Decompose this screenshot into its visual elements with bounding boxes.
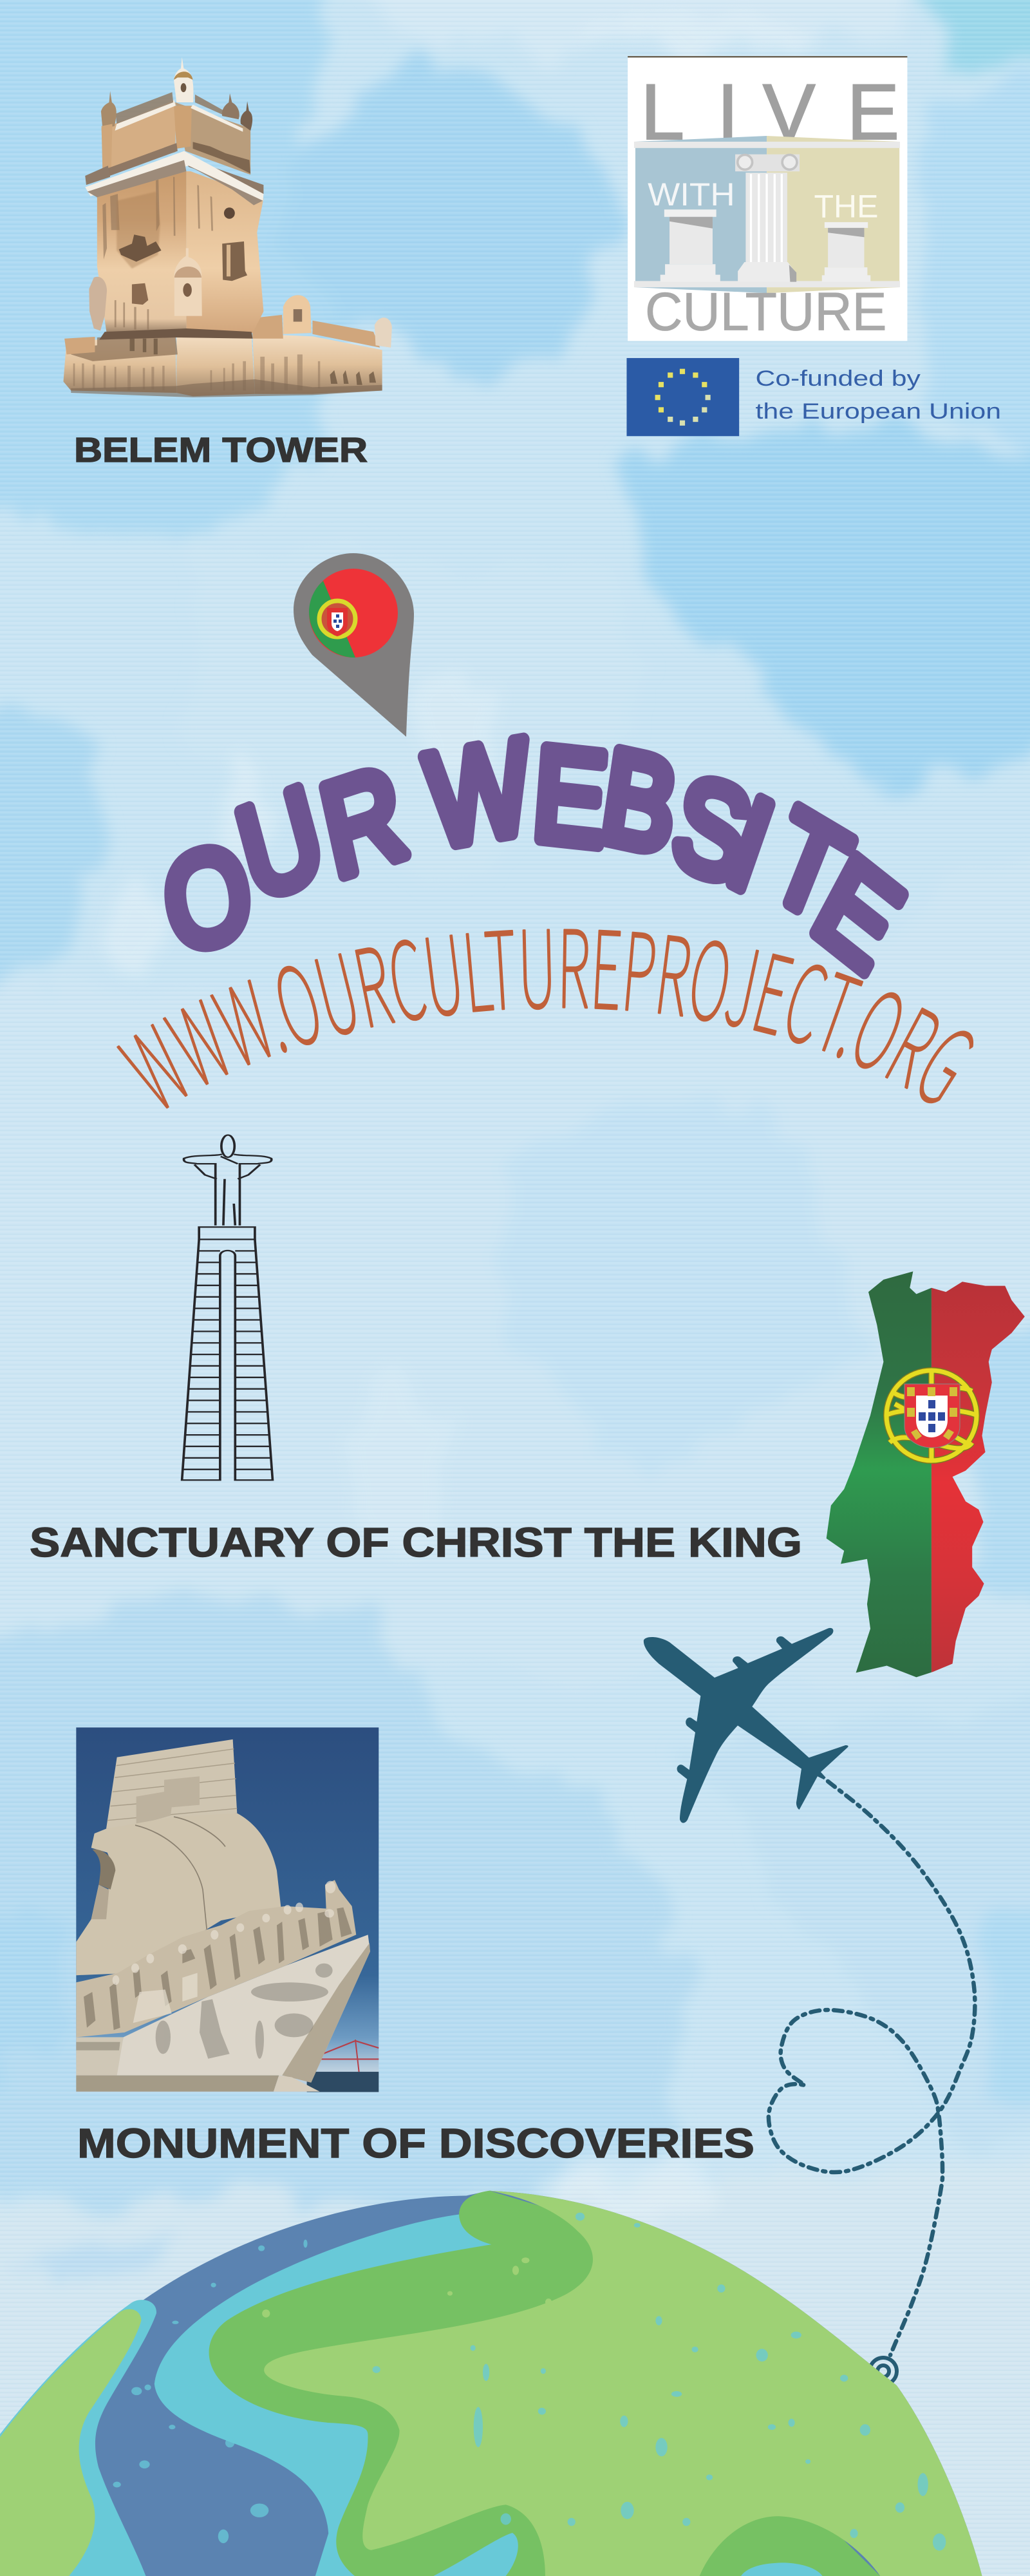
photo: Monument of Discoveries: [76, 1727, 379, 2092]
globe: coastal shelf: [209, 2191, 880, 2576]
globe: ocean: [0, 2191, 982, 2576]
tower: bastion top shadow: [71, 334, 178, 361]
EU stars: [655, 369, 711, 426]
tower: upper storey right: [176, 102, 250, 175]
tower: sentry window: [183, 283, 192, 297]
photo: sculpted figures: [76, 1880, 356, 2037]
logo: floor: [634, 281, 900, 287]
photo: water: [307, 2072, 379, 2092]
logo: top band: [635, 136, 767, 142]
EU caption line one: Co-funded by: [755, 366, 921, 391]
photo: base block shade: [76, 2042, 120, 2050]
photo: prow shaded face: [282, 1943, 370, 2083]
tower: upper corner pier: [174, 106, 192, 149]
tower: sentry turret: [174, 248, 202, 316]
globe: speckles: [113, 2213, 946, 2551]
tower: lantern dome: [174, 71, 193, 80]
globe: left shallows: [0, 2300, 156, 2576]
coat of arms: armillary sphere: [886, 1369, 977, 1462]
heading: Belem Tower: BELEM TOWER: [74, 431, 368, 469]
tower: lantern window: [181, 83, 186, 92]
flag red: [309, 569, 398, 658]
tower: body base shadow: [99, 328, 253, 340]
logo: white plate: [628, 57, 907, 341]
tower: bastion base shadow: [71, 379, 382, 397]
tower: corner dome: [241, 101, 252, 131]
flag arms shield: [327, 608, 348, 636]
globe: main land: [264, 2191, 982, 2576]
tower: main body right face: [186, 171, 263, 333]
tower: shade strokes: [102, 177, 213, 330]
tower: dome left: [101, 91, 117, 128]
tower: lantern: [174, 57, 193, 102]
tower: round window: [224, 207, 235, 219]
logo: central column: [735, 155, 800, 282]
tower: left sentry: [89, 277, 107, 330]
tower: right bastion: [253, 336, 382, 394]
flag green: [309, 581, 355, 658]
icon: route target rings: [870, 2358, 897, 2385]
tower: upper storey left: [102, 102, 176, 171]
icon: aeroplane: [644, 1628, 848, 1823]
coat of arms: castles: [907, 1387, 957, 1417]
photo: sail seam: [135, 1817, 225, 1933]
coat of arms: lower castles: [911, 1429, 954, 1440]
photo: stone slab: [106, 1739, 237, 1829]
photo: sail body: [76, 1814, 281, 1975]
logo: word THE: THE: [814, 189, 879, 225]
map: Portugal in flag colours: [827, 1271, 1025, 1677]
photo: bridge: [320, 2040, 379, 2072]
website address: WWW.OURCULTUREPROJECT.ORG: [117, 929, 973, 1109]
pin body: [294, 553, 414, 737]
photo: sail shade: [91, 1885, 109, 1919]
EU caption line two: the European Union: [755, 399, 1001, 424]
logo: top strip: [628, 56, 907, 58]
photo: arch shade: [92, 1850, 115, 1889]
map: red half: [931, 1282, 1025, 1672]
illustration: Belem Tower watercolour: [63, 57, 392, 397]
EU flag: [626, 358, 739, 436]
tower: brown wash: [117, 192, 160, 269]
logo: blue panel: [635, 147, 767, 282]
logo: Live With The Culture: [628, 56, 907, 341]
heading: Monument of Discoveries: MONUMENT OF DISCOVERIES: [77, 2120, 754, 2166]
logo: word CULTURE: CULTURE: [645, 281, 887, 341]
heading: Sanctuary of Christ the King: SANCTUARY OF CHRIST THE KING: [30, 1519, 802, 1566]
photo: slab courses: [108, 1749, 237, 1821]
globe: shallows: [154, 2211, 591, 2576]
tower: roof parapet: [115, 100, 243, 132]
photo: base block: [76, 2037, 124, 2076]
photo: sky: [76, 1727, 379, 2092]
icon: Christ the King monument outline: [182, 1135, 272, 1480]
photo: weathering: [156, 1964, 333, 2059]
photo: prow: [116, 1935, 370, 2083]
coat of arms: white field: [916, 1396, 948, 1437]
flag arms centre: [332, 612, 343, 631]
tower: balcony under shade: [88, 160, 263, 205]
photo: pavement right: [274, 2076, 320, 2092]
statue robe folds: [194, 1157, 260, 1226]
tower: central bastion: [176, 336, 255, 396]
tower: corner turret: [375, 317, 392, 348]
map: green half: [827, 1271, 932, 1677]
logo: entablature: [634, 142, 900, 148]
globe: bottom-right lake: [741, 2562, 823, 2576]
logo: beige panel: [767, 147, 899, 282]
tower: window panel: [222, 242, 247, 281]
tower: bastion merlons: [64, 315, 380, 354]
tower: roof merlons: [116, 92, 225, 124]
tower: balcony stains: [193, 142, 250, 174]
tower: window stripes: [227, 245, 230, 276]
tower: dark square window: [132, 283, 148, 305]
logo: word LIVE: LIVE: [641, 68, 899, 156]
tower: bastion turret window: [294, 309, 302, 321]
coat of arms: sphere shadow: [886, 1369, 977, 1462]
tower: sentry dome lines: [174, 267, 201, 278]
flight route: dashed line: [769, 1781, 975, 2355]
tower: bastion drips: [73, 354, 320, 390]
pedestal top: [199, 1227, 255, 1240]
logo: bottom wedge beige: [767, 287, 899, 293]
statue arms: [184, 1154, 272, 1226]
tower: left bastion: [63, 336, 176, 393]
heading: OUR WEBSITE: OUR WEBSITE: [154, 711, 922, 999]
tower: balcony railing: [85, 158, 263, 194]
tower: bastion turret: [283, 295, 312, 334]
globe: dark green speckles: [262, 2257, 552, 2318]
tower outline: [182, 1240, 272, 1480]
flag arms ring: [319, 601, 355, 637]
tower: upper left pillar: [102, 124, 112, 170]
tower: balcony white band: [85, 151, 263, 201]
tower: upper railing: [102, 143, 178, 178]
photo: pavement: [76, 2076, 279, 2092]
photo: carved cross relief: [136, 1776, 200, 1825]
illustration: globe: [0, 2191, 982, 2576]
tower: bastion arrow slits: [130, 339, 376, 385]
logo: right pedestal: [822, 222, 870, 282]
photo: figure highlights: [113, 1881, 335, 2023]
globe: left land: [0, 2309, 141, 2576]
tower: dark stain: [119, 234, 162, 261]
coat of arms: quinas: [919, 1400, 945, 1432]
flag arms dots: [333, 614, 342, 628]
logo: top band beige: [767, 136, 899, 142]
icon: location pin with Portugal flag: [294, 553, 414, 737]
tower rungs: [183, 1251, 272, 1470]
logo: left pedestal: [660, 209, 720, 282]
photo: figure shadows: [84, 1908, 352, 2030]
statue head: [221, 1135, 234, 1157]
logo: bottom wedge: [635, 287, 767, 293]
tower: dome right: [222, 93, 239, 119]
coat of arms: shield: [904, 1384, 960, 1448]
logo: word WITH: WITH: [648, 176, 735, 213]
logo: EU co-funded badge: [626, 358, 1001, 436]
tower: main body left face: [97, 171, 186, 336]
